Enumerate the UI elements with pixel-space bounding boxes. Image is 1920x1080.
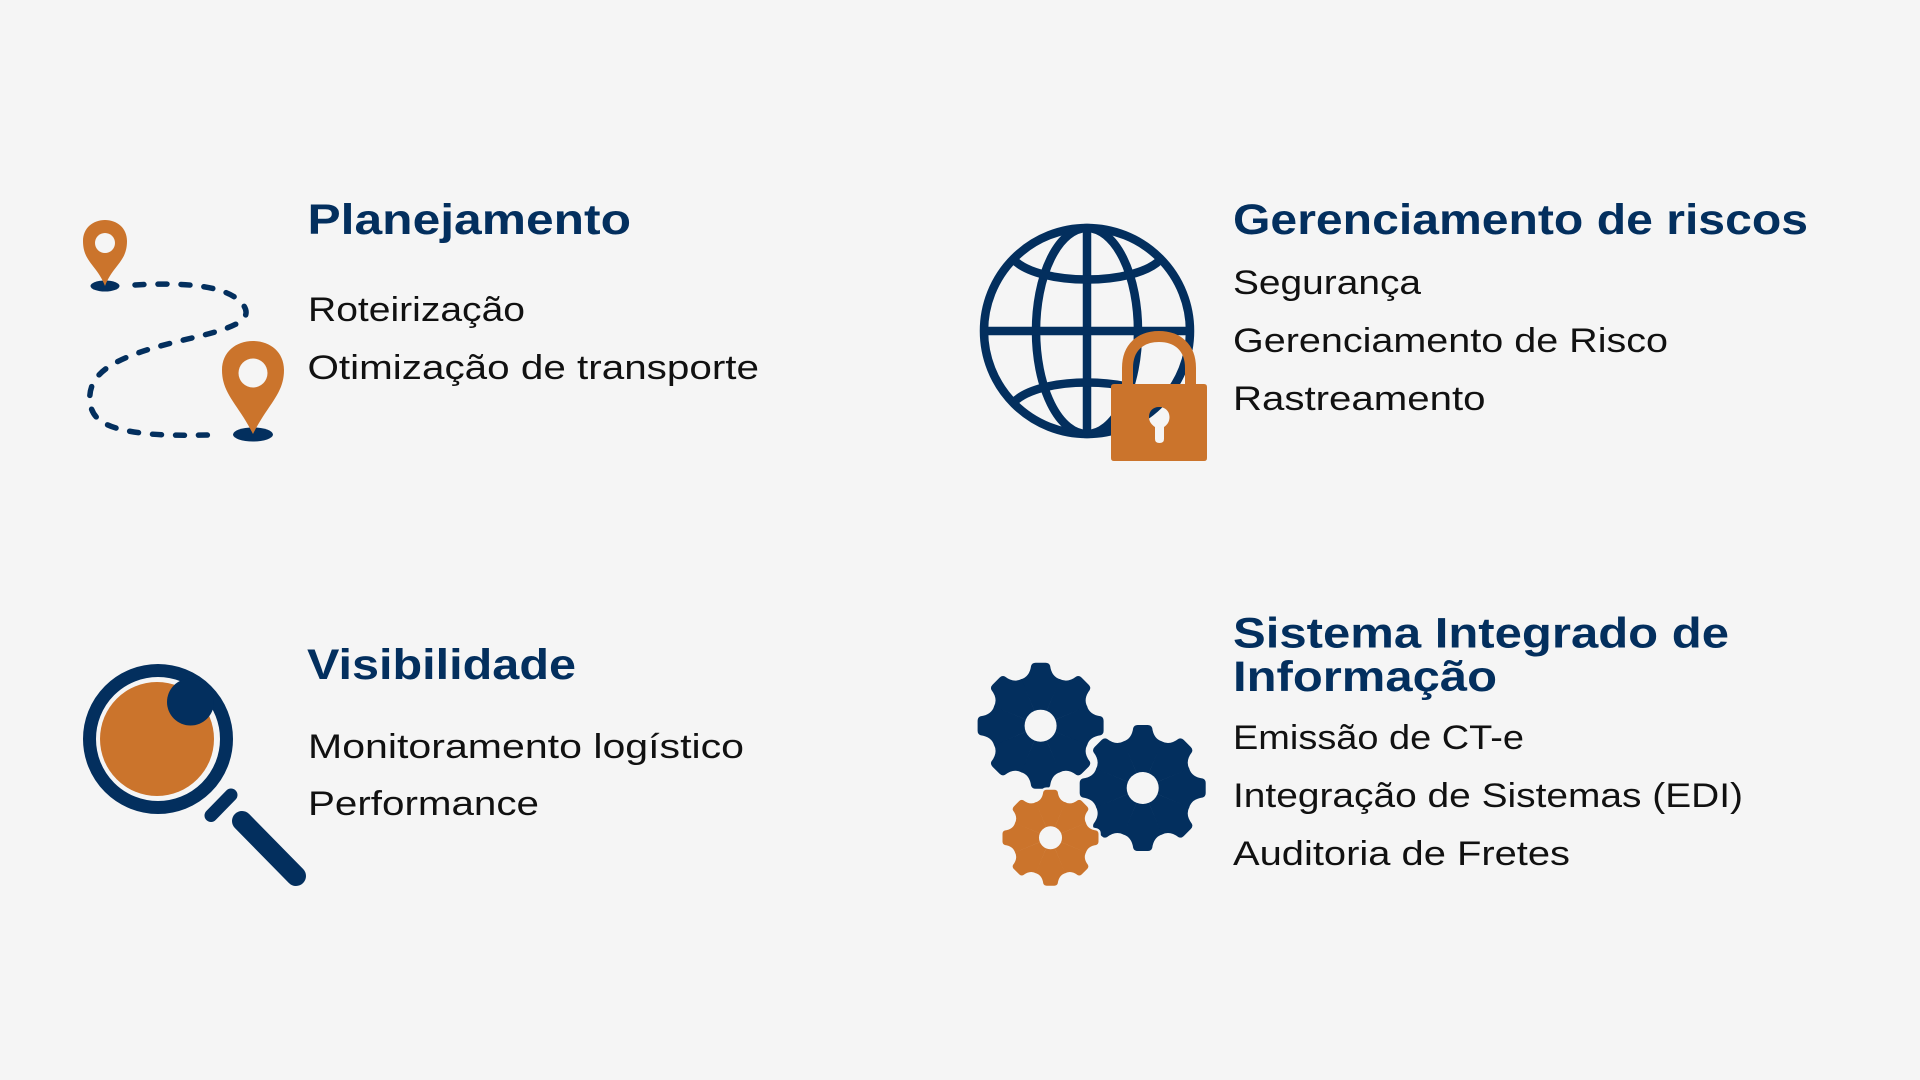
text: Monitoramento logístico: Monitoramento logístico (308, 728, 744, 766)
text: Integração de Sistemas (EDI): Integração de Sistemas (EDI) (1233, 777, 1743, 815)
panel: sistema integrado de informação (978, 610, 1743, 886)
panel: gerenciamento de riscos (984, 196, 1808, 461)
text: Segurança: Segurança (1233, 264, 1421, 302)
icon: magnifying glass (90, 670, 296, 876)
text: Auditoria de Fretes: Auditoria de Fretes (1233, 835, 1570, 873)
heading: Visibilidade: Visibilidade (307, 641, 576, 689)
text: Performance: Performance (308, 785, 539, 823)
heading: Sistema Integrado de Informação: Informação (1233, 653, 1497, 701)
text: Emissão de CT-e: Emissão de CT-e (1233, 719, 1524, 757)
heading: Gerenciamento de riscos: Gerenciamento de riscos (1233, 196, 1808, 244)
heading: Planejamento: Planejamento (308, 196, 631, 244)
heading: Sistema Integrado de Informação: Sistema Integrado de (1233, 610, 1729, 658)
text: Roteirização: Roteirização (308, 291, 525, 329)
heading: Sistema Integrado de Informação (1233, 610, 1729, 701)
icon: globe with padlock (984, 228, 1207, 461)
panel: planejamento (83, 196, 759, 442)
text: Otimização de transporte: Otimização de transporte (308, 349, 759, 387)
text: Rastreamento: Rastreamento (1233, 380, 1486, 418)
icon: route with two map pins (83, 220, 284, 442)
text: Gerenciamento de Risco: Gerenciamento de Risco (1233, 322, 1668, 360)
icon: three gears (978, 663, 1206, 886)
panel: visibilidade (90, 641, 744, 876)
